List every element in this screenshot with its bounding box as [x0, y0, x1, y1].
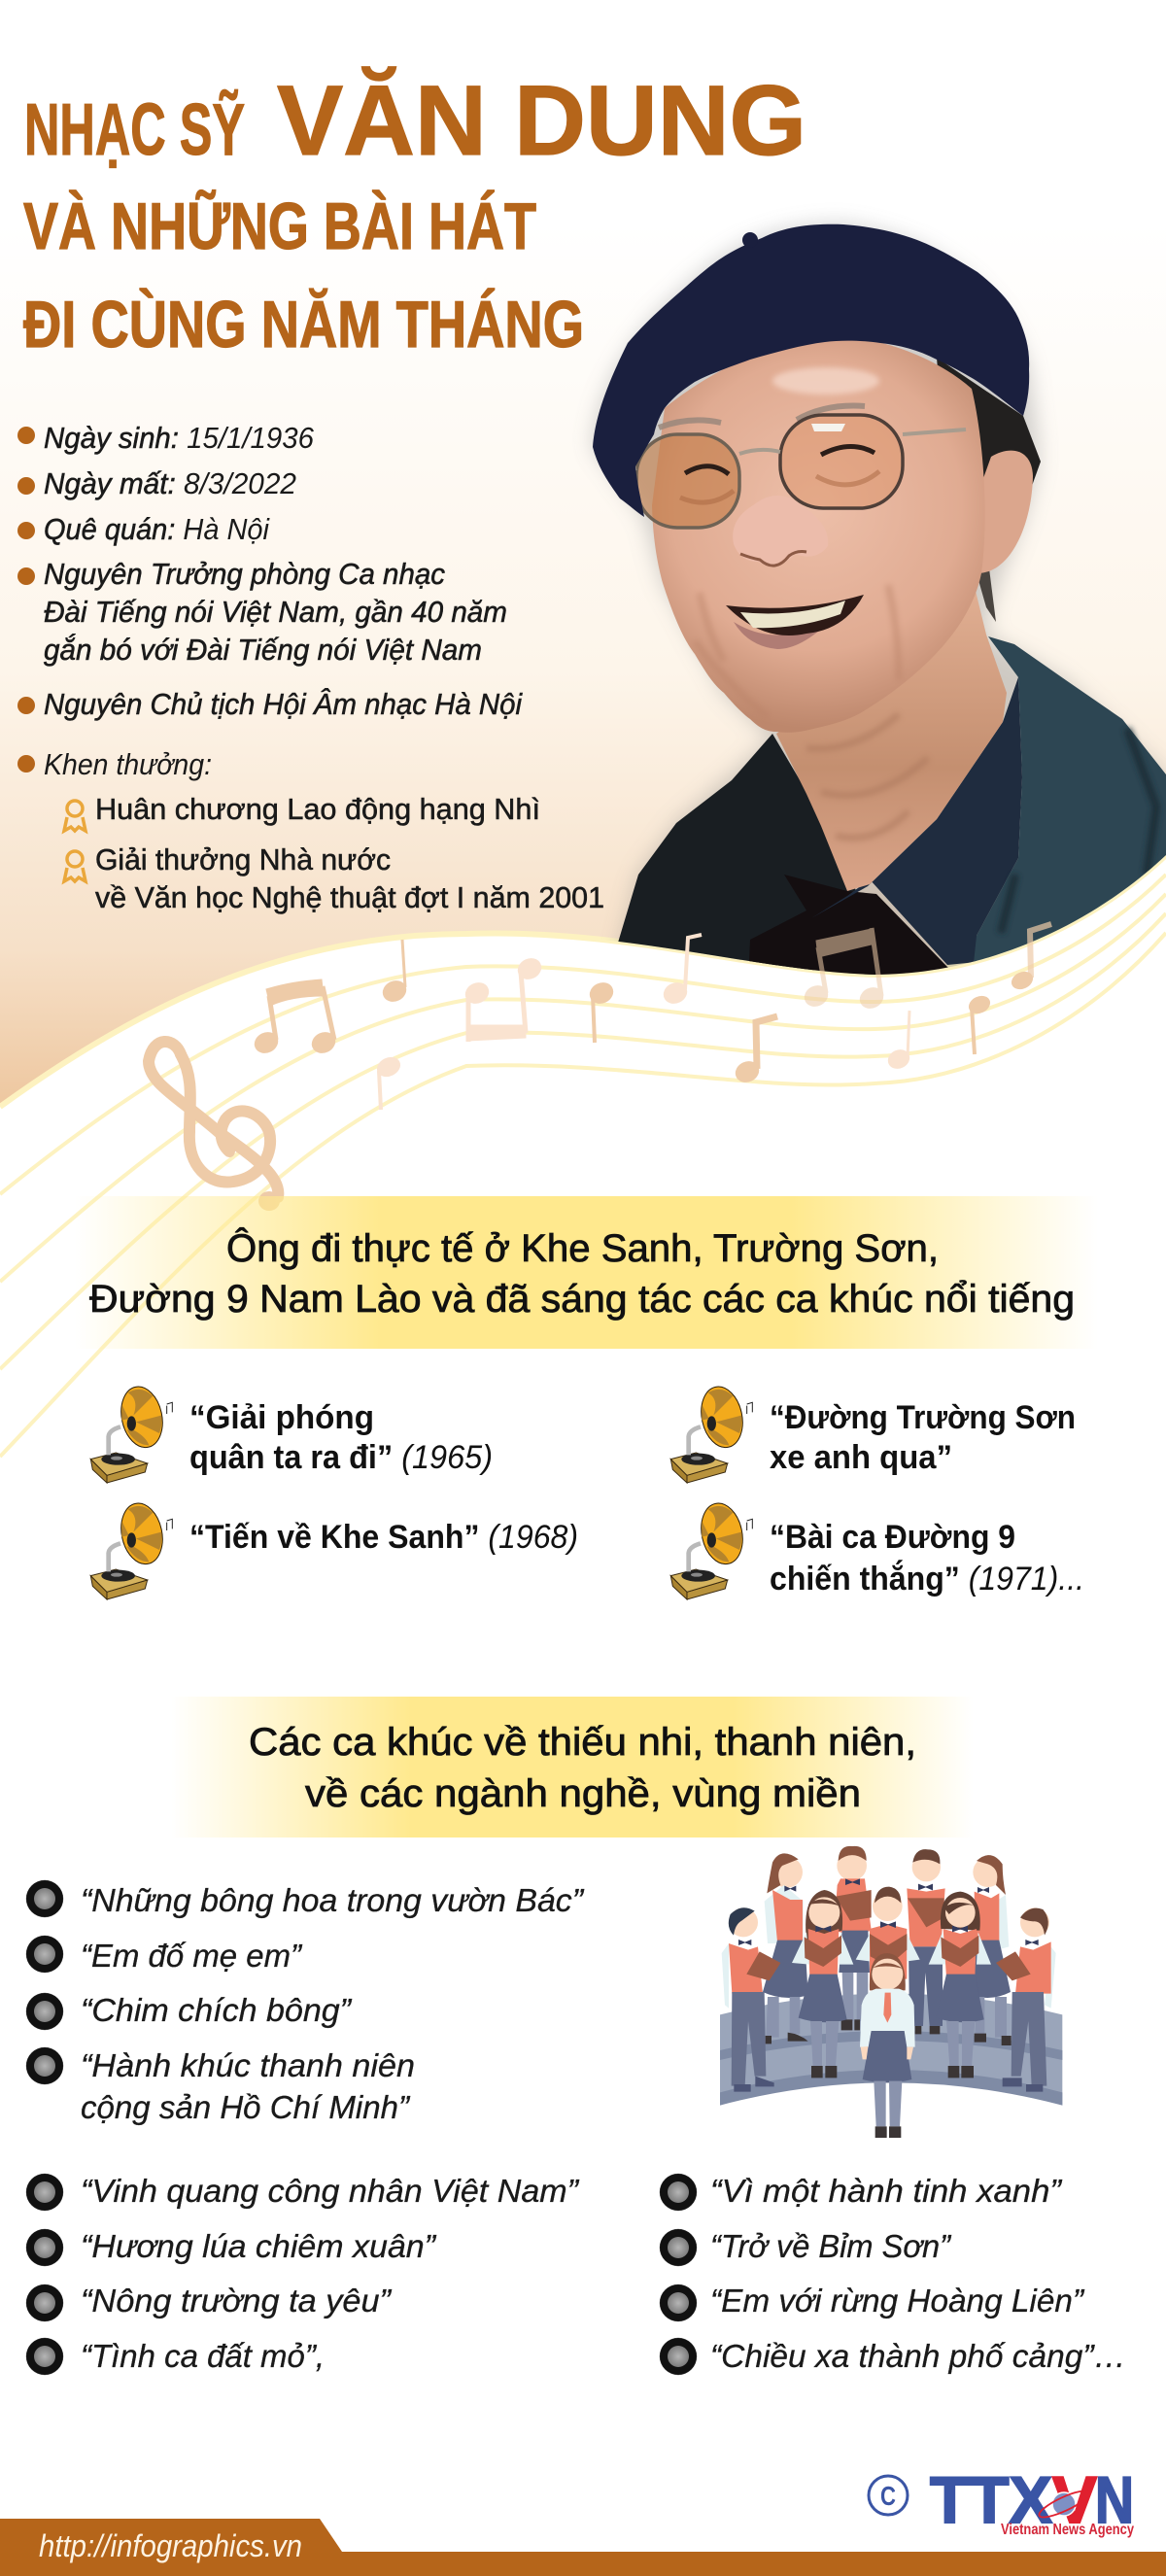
stage	[720, 1994, 1062, 2106]
logo: copyright and TTXVN	[869, 2463, 1134, 2538]
footer bar with URL: http://infographics.vn	[39, 2528, 302, 2563]
ear	[981, 451, 1033, 573]
portrait photo of Văn Dung	[593, 224, 1166, 981]
lower lip	[734, 622, 818, 649]
bullet dots	[17, 427, 35, 773]
nose	[733, 496, 828, 566]
neck	[776, 583, 1007, 891]
song list: professions left: “Nông trường ta yêu”	[81, 2283, 393, 2318]
section banner 1: Ông đi thực tế ở Khe Sanh, Trường Sơn,	[226, 1226, 939, 1270]
wordmark: V	[1052, 2463, 1097, 2537]
song: Đường Trường Sơn xe anh qua: xe anh qua”	[770, 1439, 952, 1476]
song list: children and youth: “Em đố mẹ em”	[81, 1938, 303, 1974]
eighth note	[380, 940, 409, 1005]
song: Bài ca Đường 9 chiến thắng: chiến thắng” (1971)...	[770, 1561, 1084, 1597]
section banner 2: Các ca khúc về thiếu nhi, thanh niên,	[249, 1721, 916, 1764]
beamed note	[802, 928, 886, 1012]
record bullets	[26, 1880, 63, 2084]
section banner 2	[171, 1697, 974, 1838]
song: Giải phóng quân ta ra đi: quân ta ra đi” (1965)	[189, 1439, 493, 1476]
song list: children and youth: “Hành khúc thanh niên	[81, 2047, 415, 2083]
song: Bài ca Đường 9 chiến thắng: “Bài ca Đường 9	[770, 1519, 1015, 1556]
back row singer: girl left	[763, 1853, 808, 2044]
icon: medal	[64, 851, 86, 881]
black inner shirt	[749, 875, 948, 975]
copyright symbol	[869, 2476, 908, 2515]
section banner 2: về các ngành nghề, vùng miền	[305, 1772, 861, 1815]
song: Giải phóng quân ta ra đi	[189, 1399, 493, 1476]
song: Đường Trường Sơn xe anh qua	[770, 1399, 1076, 1476]
back row singer: boy centre	[907, 1849, 945, 2034]
song: Đường Trường Sơn xe anh qua: “Đường Trường Sơn	[770, 1399, 1076, 1436]
biography text: Nguyên Trưởng phòng Ca nhạc	[44, 557, 445, 591]
copyright symbol: C	[880, 2481, 896, 2511]
song list: children and youth: “Những bông hoa trong vườn Bác”	[81, 1882, 585, 1918]
beamed note	[252, 979, 338, 1056]
footer bar with URL	[0, 2519, 1166, 2576]
biography text: Nguyên Chủ tịch Hội Âm nhạc Hà Nội	[44, 687, 523, 721]
tagline: Vietnam News Agency	[1001, 2522, 1134, 2538]
outer singer: boy right	[996, 1907, 1056, 2092]
face	[652, 335, 985, 733]
cheek shading	[698, 585, 901, 673]
eighth note	[1010, 924, 1051, 992]
middle row singer: girl left	[792, 1890, 853, 2078]
back row singer: girl right	[973, 1855, 1012, 2045]
song list: professions right: “Em với rừng Hoàng Liên”	[710, 2283, 1085, 2318]
decorative music notes	[252, 924, 1051, 1110]
eighth note	[661, 935, 702, 1007]
wordmark: TTX	[930, 2463, 1052, 2537]
biography text: Ngày mất: 8/3/2022	[44, 466, 296, 500]
song list: professions right: “Vì một hành tinh xanh”	[710, 2173, 1063, 2209]
illustration: choir	[720, 1846, 1062, 2138]
award text: Huân chương Lao động hạng Nhì	[95, 792, 540, 826]
song: Bài ca Đường 9 chiến thắng	[770, 1519, 1084, 1597]
beret	[593, 224, 1029, 517]
middle row singer: boy centre	[856, 1887, 920, 1979]
middle row singer: girl right	[929, 1892, 991, 2078]
section banner 1: Đường 9 Nam Lào và đã sáng tác các ca khúc nổi tiếng	[89, 1278, 1075, 1321]
biography list	[17, 421, 604, 914]
song list: professions left: “Tình ca đất mỏ”,	[81, 2338, 325, 2374]
square beamed note	[463, 955, 544, 1042]
eyebrows	[659, 406, 865, 428]
song list: professions left: “Hương lúa chiêm xuân”	[81, 2228, 437, 2264]
song list: children and youth: cộng sản Hồ Chí Minh”	[81, 2089, 411, 2125]
song list: professions right	[660, 2173, 1126, 2375]
background: cream gradient with wave	[0, 395, 1166, 1104]
globe	[1037, 2487, 1091, 2522]
black jacket left	[618, 734, 855, 970]
biography text	[44, 421, 523, 781]
icon: medal	[64, 801, 86, 831]
biography text: gắn bó với Đài Tiếng nói Việt Nam	[44, 633, 482, 667]
eighth note	[733, 1016, 777, 1085]
eyes	[685, 446, 874, 474]
mouth and teeth	[726, 595, 864, 635]
song list: professions left: “Vinh quang công nhân Việt Nam”	[81, 2173, 580, 2209]
song list: children and youth	[26, 1880, 585, 2125]
song: Tiến về Khe Sanh: “Tiến về Khe Sanh” (1968)	[189, 1519, 578, 1556]
music staff lines	[0, 855, 1166, 1457]
outer singer: boy left	[722, 1907, 780, 2092]
hair	[937, 360, 1041, 484]
award text	[95, 842, 604, 914]
title: VÀ NHỮNG BÀI HÁT	[23, 189, 536, 263]
wordmark: N	[1095, 2463, 1134, 2537]
song list: professions left	[26, 2173, 580, 2375]
title	[23, 65, 806, 361]
record bullets	[660, 2174, 697, 2375]
front girl soloist	[860, 1953, 915, 2138]
song list: professions right: “Trở về Bỉm Sơn”	[710, 2228, 952, 2264]
icon: gramophone	[90, 1499, 172, 1599]
bow ties	[738, 1878, 1039, 1945]
faint quarter note	[374, 1054, 403, 1110]
biography text: Quê quán: Hà Nội	[44, 512, 270, 546]
record bullets	[26, 2174, 63, 2375]
title: NHẠC SỸ	[24, 88, 245, 170]
title: VĂN DUNG	[277, 65, 806, 176]
blue-grey jacket right	[972, 636, 1166, 981]
award text: về Văn học Nghệ thuật đợt I năm 2001	[95, 880, 604, 914]
glasses	[626, 415, 966, 528]
biography text: Khen thưởng:	[44, 747, 212, 781]
quarter note	[587, 979, 616, 1043]
icon: gramophone	[670, 1499, 752, 1599]
icon: treble clef	[149, 1042, 280, 1211]
faint quarter note	[885, 1011, 912, 1072]
soft shadow halo	[593, 224, 1166, 981]
award text: Giải thưởng Nhà nước	[95, 842, 391, 876]
icon: gramophone	[90, 1383, 172, 1483]
icon: gramophone	[670, 1383, 752, 1483]
section banner 1	[75, 1196, 1098, 1349]
forehead highlight	[772, 367, 879, 395]
song list: professions right: “Chiều xa thành phố cảng”…	[710, 2338, 1126, 2374]
song: Giải phóng quân ta ra đi: “Giải phóng	[189, 1399, 374, 1436]
title: ĐI CÙNG NĂM THÁNG	[23, 288, 584, 361]
quarter note	[967, 993, 992, 1054]
back row singer: girl centre	[834, 1846, 872, 2030]
wordmark	[930, 2463, 1134, 2537]
navy collar	[811, 677, 1022, 965]
song list: children and youth: “Chim chích bông”	[81, 1992, 353, 2028]
biography text: Ngày sinh: 15/1/1936	[44, 421, 315, 455]
biography text: Đài Tiếng nói Việt Nam, gần 40 năm	[44, 595, 507, 629]
